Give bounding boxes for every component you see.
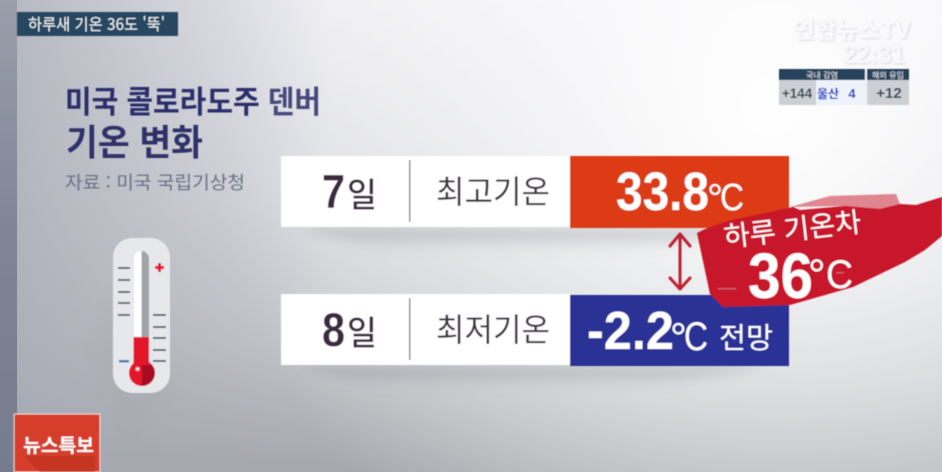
row: 8일 최저기온: C <box>684 315 708 359</box>
callout: daily temperature gap: 하루 기온차 <box>721 201 863 256</box>
headline ticker: 하루새 기온 36도 '뚝' <box>28 11 165 35</box>
covid status box: 4 <box>848 86 856 101</box>
title: 기온 변화 <box>66 114 203 166</box>
covid status box: 울산 <box>817 85 839 102</box>
covid status box: +144 <box>782 85 812 101</box>
callout: daily temperature gap: 36 <box>748 240 813 312</box>
badge: news special: 뉴스특보 <box>23 431 94 458</box>
broadcaster logo and clock <box>793 13 910 69</box>
row: 8일 최저기온: 일 <box>347 306 377 355</box>
badge: news special <box>14 414 100 472</box>
covid status box <box>779 69 909 105</box>
row: 7일 최고기온: C <box>720 177 744 219</box>
callout: daily temperature gap: C <box>826 253 853 297</box>
row: 7일 최고기온: 일 <box>347 168 377 217</box>
source note: 자료 : 미국 국립기상청 <box>65 169 245 195</box>
row: 8일 최저기온: 전망 <box>719 315 773 357</box>
row: 8일 최저기온: ° <box>670 314 687 361</box>
title: 미국 콜로라도주 덴버 <box>65 77 321 122</box>
callout: daily temperature gap <box>697 194 942 312</box>
row: 7일 최고기온: 7 <box>322 165 345 218</box>
covid status box: +12 <box>876 85 902 102</box>
row: 8일 최저기온: 8 <box>322 303 345 356</box>
callout: daily temperature gap: ° <box>808 251 826 300</box>
row: 7일 최고기온: 33.8 <box>616 162 709 222</box>
covid status box: 해외 유입 <box>872 70 904 81</box>
covid status box: 국내 감염 <box>806 70 838 81</box>
arrow: between high and low <box>670 234 690 289</box>
row: 7일 최고기온: ° <box>707 177 723 221</box>
row: 7일 최고기온: 최고기온 <box>436 167 550 213</box>
broadcaster logo and clock: 22:31 <box>843 41 905 69</box>
broadcaster logo and clock: 연합뉴스TV <box>793 13 910 45</box>
row: 8일 최저기온 <box>281 294 789 366</box>
title <box>65 77 321 166</box>
icon: thermometer <box>92 238 170 430</box>
row: 7일 최고기온 <box>281 156 789 228</box>
row: 8일 최저기온: 최저기온 <box>436 305 550 351</box>
row: 8일 최저기온: -2.2 <box>587 301 674 361</box>
